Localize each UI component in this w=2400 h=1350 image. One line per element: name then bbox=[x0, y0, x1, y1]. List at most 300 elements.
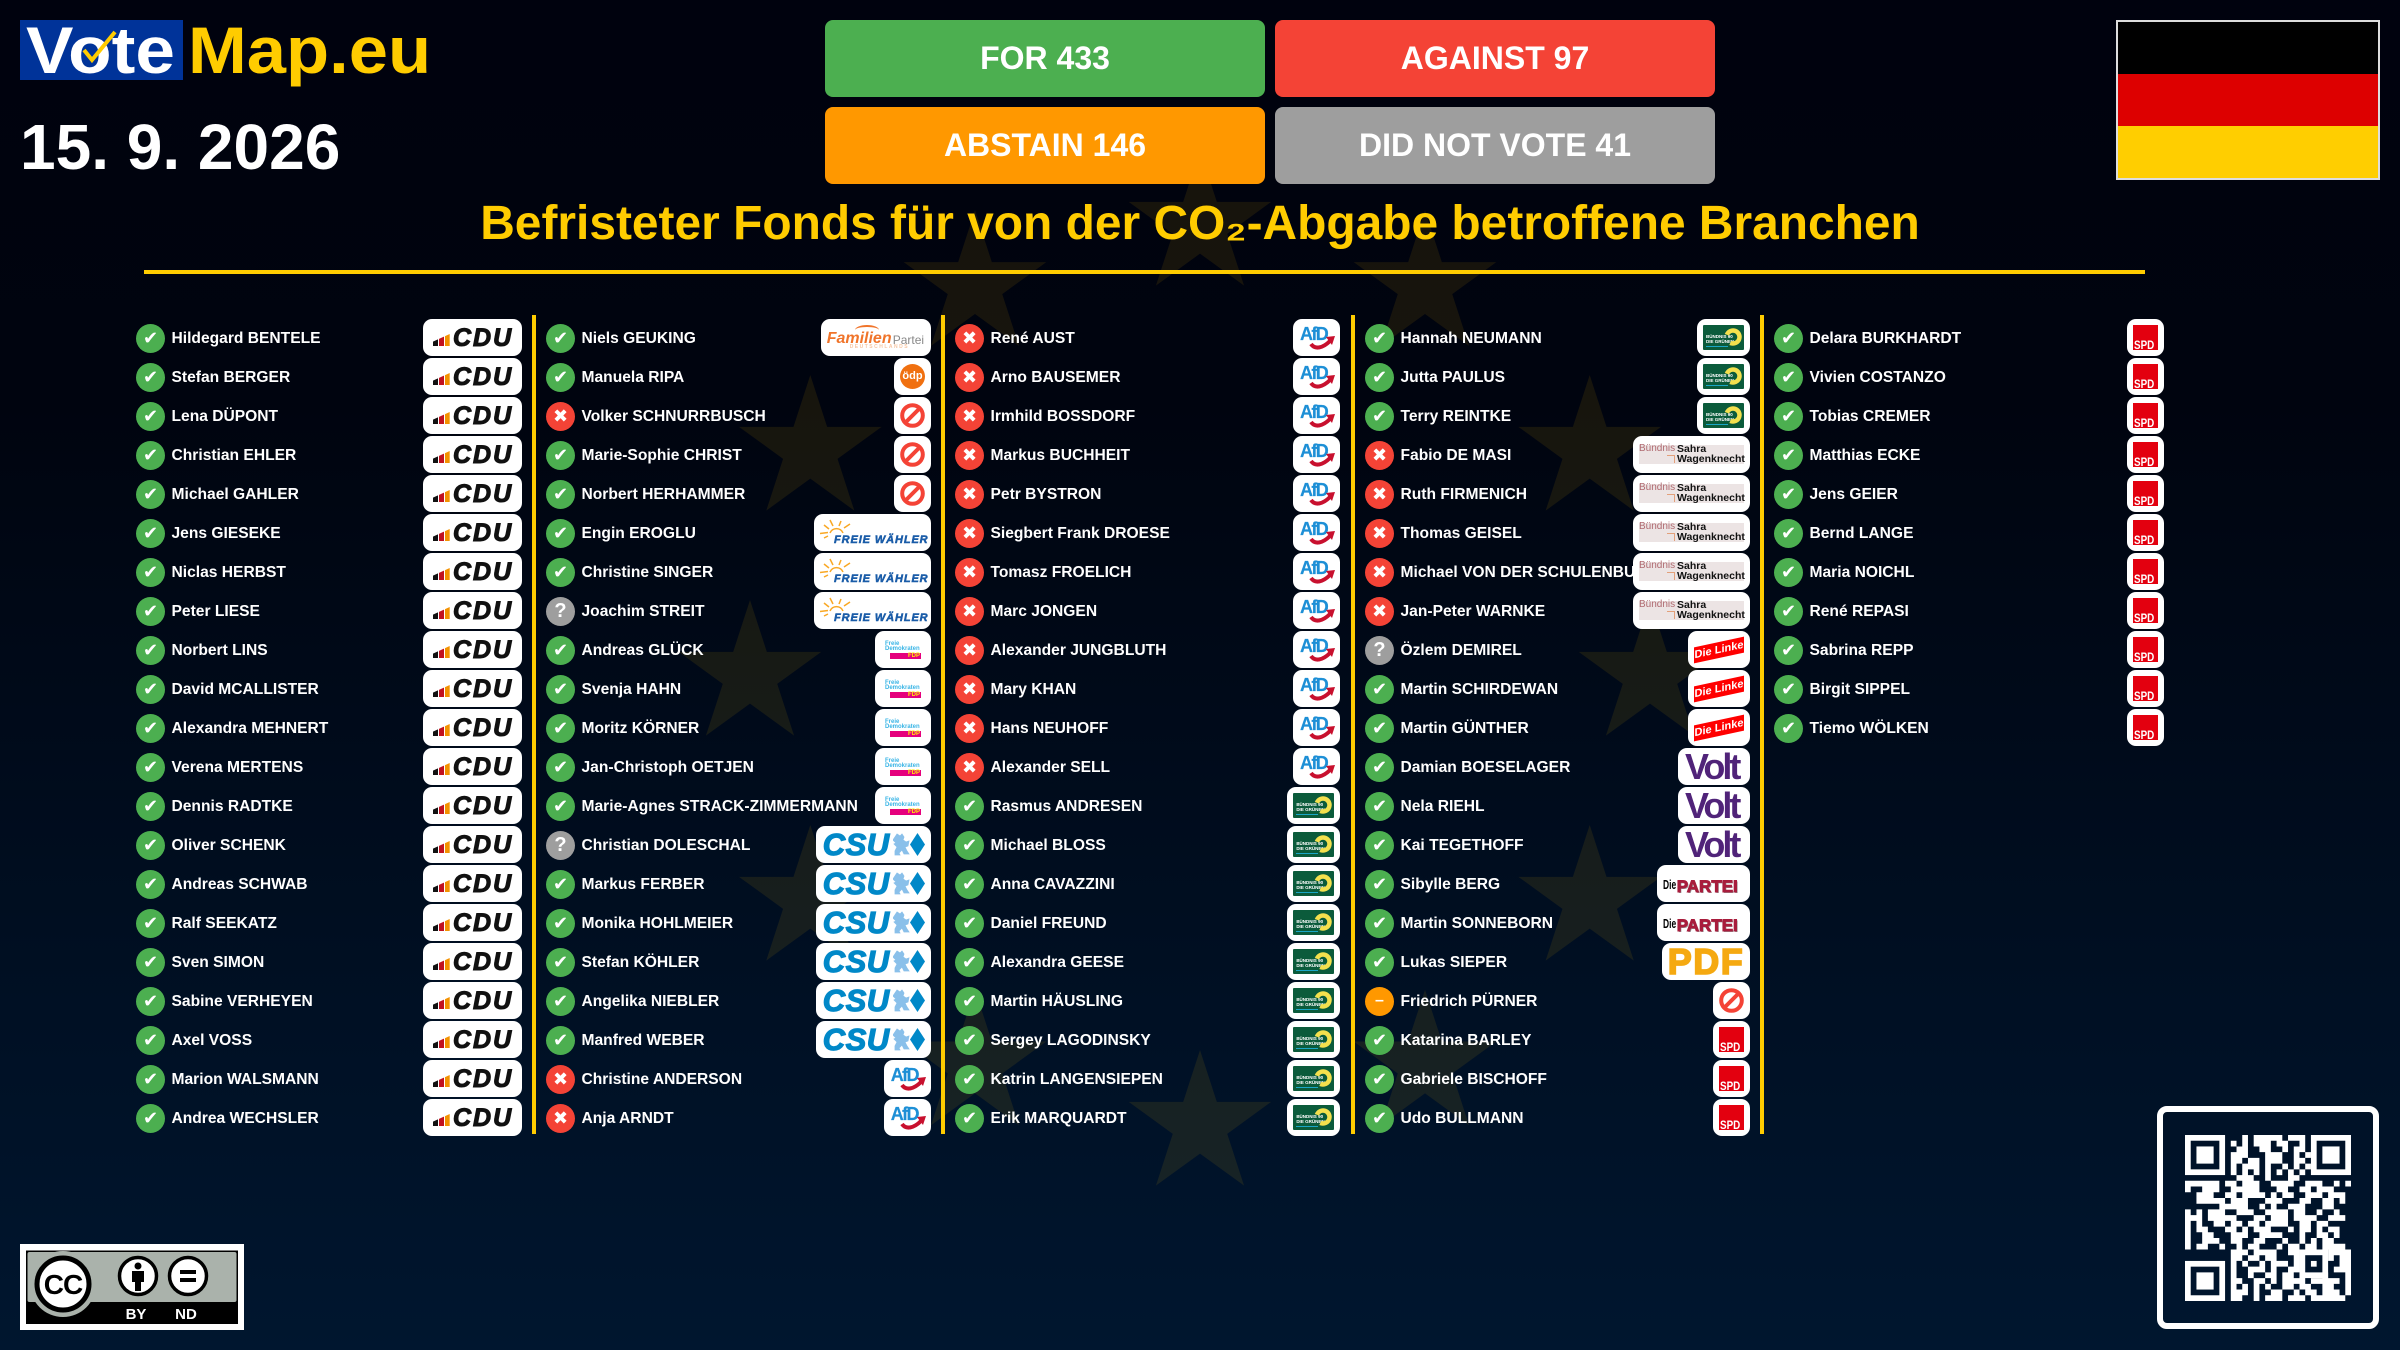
logo: Freie Wähler bbox=[814, 514, 931, 551]
logo: SPD bbox=[2127, 358, 2164, 395]
row: Katrin LANGENSIEPEN bbox=[955, 1060, 1340, 1097]
row: Martin SCHIRDEWAN: Martin SCHIRDEWAN bbox=[1400, 681, 1558, 698]
logo: CDU: CDU bbox=[453, 986, 513, 1014]
logo: BSW bbox=[1633, 514, 1750, 551]
row: Andrea WECHSLER: ✔ bbox=[143, 1108, 158, 1129]
row: Alexandra GEESE bbox=[955, 943, 1340, 980]
logo: Grüne: BÜNDNIS 90 bbox=[1706, 373, 1733, 378]
row: Volker SCHNURRBUSCH: ✖ bbox=[553, 406, 568, 427]
logo: CDU: CDU bbox=[453, 480, 513, 508]
row: Dennis RADTKE: ✔ bbox=[143, 796, 158, 817]
row: Svenja HAHN: Svenja HAHN bbox=[582, 681, 681, 698]
logo: CSU: CSU bbox=[823, 827, 890, 862]
logo: AfD bbox=[1293, 397, 1340, 434]
logo: CDU bbox=[423, 865, 522, 902]
row: Tobias CREMER: Tobias CREMER bbox=[1810, 408, 1931, 425]
logo: AfD: AfD bbox=[1300, 636, 1327, 656]
row: Michael VON DER SCHULENBURG: Michael VON DER SCHULENBURG bbox=[1400, 564, 1659, 581]
row: Monika HOHLMEIER: Monika HOHLMEIER bbox=[582, 915, 733, 932]
row: Svenja HAHN: ✔ bbox=[553, 679, 568, 700]
logo: CDU bbox=[423, 1060, 522, 1097]
logo: BSW: Wagenknecht bbox=[1677, 492, 1745, 504]
row: Oliver SCHENK bbox=[136, 826, 522, 863]
logo: SPD: SPD bbox=[1720, 1079, 1740, 1093]
row: Alexander JUNGBLUTH: Alexander JUNGBLUTH bbox=[990, 642, 1166, 659]
row: Martin HÄUSLING bbox=[955, 982, 1340, 1019]
row: Gabriele BISCHOFF: ✔ bbox=[1372, 1069, 1387, 1090]
row: Hans NEUHOFF: ✖ bbox=[962, 718, 977, 739]
logo: Die Linke bbox=[1688, 631, 1750, 668]
row: Jan-Peter WARNKE: ✖ bbox=[1372, 601, 1387, 622]
row: Udo BULLMANN: Udo BULLMANN bbox=[1400, 1110, 1524, 1127]
logo: SPD: SPD bbox=[2134, 650, 2154, 664]
row: Arno BAUSEMER: ✖ bbox=[962, 367, 977, 388]
logo: SPD: SPD bbox=[1720, 1040, 1740, 1054]
row: Tobias CREMER bbox=[1774, 397, 2164, 434]
logo: CSU bbox=[816, 982, 931, 1019]
row: Christian DOLESCHAL: ? bbox=[554, 834, 567, 856]
row: Christian DOLESCHAL: Christian DOLESCHAL bbox=[582, 837, 750, 854]
logo: SPD bbox=[2127, 436, 2164, 473]
logo: SPD bbox=[2127, 514, 2164, 551]
row: Tomasz FROELICH bbox=[955, 553, 1340, 590]
logo: AfD: AfD bbox=[1300, 753, 1327, 773]
row: Marie-Agnes STRACK-ZIMMERMANN bbox=[546, 787, 931, 824]
row: Katarina BARLEY bbox=[1365, 1021, 1750, 1058]
row: Christine ANDERSON: ✖ bbox=[553, 1069, 568, 1090]
row: Hannah NEUMANN: Hannah NEUMANN bbox=[1400, 330, 1542, 347]
logo: CDU bbox=[423, 748, 522, 785]
row: Matthias ECKE: Matthias ECKE bbox=[1810, 447, 1920, 464]
row: Manuela RIPA bbox=[546, 358, 931, 395]
logo: CDU bbox=[423, 826, 522, 863]
row: Ralf SEEKATZ: Ralf SEEKATZ bbox=[172, 915, 277, 932]
logo: CSU bbox=[816, 1021, 931, 1058]
row: Jutta PAULUS: ✔ bbox=[1372, 367, 1387, 388]
logo: Grüne bbox=[1287, 1099, 1340, 1136]
row: Kai TEGETHOFF bbox=[1365, 826, 1750, 863]
logo: Die Linke bbox=[1688, 709, 1750, 746]
row: Alexandra MEHNERT: Alexandra MEHNERT bbox=[172, 720, 328, 737]
row: Monika HOHLMEIER bbox=[546, 904, 931, 941]
row: Thomas GEISEL bbox=[1365, 514, 1750, 551]
logo: BSW: Bündnis bbox=[1639, 599, 1675, 610]
row: Sabine VERHEYEN: Sabine VERHEYEN bbox=[172, 993, 313, 1010]
vote count: abstain bbox=[825, 107, 1265, 184]
logo: SPD: SPD bbox=[2134, 611, 2154, 625]
row: Monika HOHLMEIER: ✔ bbox=[553, 913, 568, 934]
row: Hannah NEUMANN bbox=[1365, 319, 1750, 356]
license badge: CC BY-ND: BY bbox=[126, 1306, 146, 1323]
row: Katrin LANGENSIEPEN: Katrin LANGENSIEPEN bbox=[990, 1071, 1163, 1088]
logo: CDU bbox=[423, 631, 522, 668]
row: Fabio DE MASI: Fabio DE MASI bbox=[1400, 447, 1511, 464]
logo: AfD: AfD bbox=[1300, 402, 1327, 422]
row: Niels GEUKING bbox=[546, 319, 931, 356]
row: Nela RIEHL bbox=[1365, 787, 1750, 824]
row: Engin EROGLU: Engin EROGLU bbox=[582, 525, 696, 542]
logo: SPD bbox=[1713, 1060, 1750, 1097]
logo: SPD: SPD bbox=[2134, 533, 2154, 547]
logo: SPD bbox=[2127, 319, 2164, 356]
logo: Grüne: DIE GRÜNEN bbox=[1706, 339, 1734, 344]
row: Lukas SIEPER: ✔ bbox=[1372, 952, 1387, 973]
logo: ödp: ödp bbox=[902, 370, 923, 382]
row: Marie-Sophie CHRIST: Marie-Sophie CHRIST bbox=[582, 447, 742, 464]
row: Christian EHLER bbox=[136, 436, 522, 473]
row: Marie-Sophie CHRIST: ✔ bbox=[553, 445, 568, 466]
row: Markus BUCHHEIT: Markus BUCHHEIT bbox=[990, 447, 1130, 464]
logo: FDP: FDP bbox=[908, 770, 920, 776]
logo: AfD bbox=[1293, 553, 1340, 590]
logo: FDP: Demokraten bbox=[885, 684, 920, 690]
panel: column 5 bbox=[1774, 319, 2164, 748]
logo: CDU: CDU bbox=[453, 1104, 513, 1132]
logo: CDU: CDU bbox=[453, 792, 513, 820]
row: Norbert HERHAMMER: Norbert HERHAMMER bbox=[582, 486, 745, 503]
row: Irmhild BOSSDORF: Irmhild BOSSDORF bbox=[990, 408, 1135, 425]
row: Christine SINGER: ✔ bbox=[553, 562, 568, 583]
row: Jens GEIER: Jens GEIER bbox=[1810, 486, 1898, 503]
row: Michael GAHLER: Michael GAHLER bbox=[172, 486, 299, 503]
row: Terry REINTKE bbox=[1365, 397, 1750, 434]
logo: AfD: AfD bbox=[1300, 441, 1327, 461]
row: Arno BAUSEMER: Arno BAUSEMER bbox=[990, 369, 1120, 386]
row: Niclas HERBST: Niclas HERBST bbox=[172, 564, 286, 581]
logo: BSW: Sahra bbox=[1677, 560, 1706, 572]
row: Angelika NIEBLER: ✔ bbox=[553, 991, 568, 1012]
row: René REPASI: René REPASI bbox=[1810, 603, 1909, 620]
logo: VoteMap.eu: Vote bbox=[26, 13, 174, 87]
logo: Grüne bbox=[1287, 787, 1340, 824]
vote count: did not vote bbox=[1275, 107, 1715, 184]
row: René AUST: ✖ bbox=[962, 328, 977, 349]
logo: CDU bbox=[423, 553, 522, 590]
row: Christian DOLESCHAL bbox=[546, 826, 931, 863]
logo: AfD bbox=[1293, 358, 1340, 395]
logo: SPD bbox=[2127, 553, 2164, 590]
logo: CSU bbox=[816, 943, 931, 980]
logo: Familien-Partei: Partei bbox=[893, 333, 924, 347]
logo: Freie Wähler: FREIE WÄHLER bbox=[834, 612, 929, 624]
logo: Grüne: DIE GRÜNEN bbox=[1296, 807, 1325, 812]
title: Befristeter Fonds für von der CO₂-Abgabe betroffene Branchen bbox=[480, 197, 1920, 250]
row: Martin SONNEBORN: ✔ bbox=[1372, 913, 1387, 934]
logo: CSU: CSU bbox=[823, 866, 890, 901]
row: Ruth FIRMENICH: ✖ bbox=[1372, 484, 1387, 505]
row: Engin EROGLU: ✔ bbox=[553, 523, 568, 544]
row: Lukas SIEPER: Lukas SIEPER bbox=[1400, 954, 1507, 971]
row: Ruth FIRMENICH: Ruth FIRMENICH bbox=[1400, 486, 1527, 503]
row: Kai TEGETHOFF: Kai TEGETHOFF bbox=[1400, 837, 1524, 854]
row: Jens GIESEKE: ✔ bbox=[143, 523, 158, 544]
row: Fabio DE MASI bbox=[1365, 436, 1750, 473]
row: Hans NEUHOFF bbox=[955, 709, 1340, 746]
logo: BSW bbox=[1633, 475, 1750, 512]
row: Jens GIESEKE bbox=[136, 514, 522, 551]
row: Niclas HERBST bbox=[136, 553, 522, 590]
row: Michael GAHLER bbox=[136, 475, 522, 512]
logo: Grüne bbox=[1287, 943, 1340, 980]
logo: Grüne bbox=[1287, 865, 1340, 902]
logo: Die PARTEI: Die bbox=[1663, 916, 1676, 931]
row: Damian BOESELAGER bbox=[1365, 748, 1750, 785]
logo: SPD bbox=[2127, 631, 2164, 668]
row: Alexandra GEESE: ✔ bbox=[962, 952, 977, 973]
row: Dennis RADTKE bbox=[136, 787, 522, 824]
logo: CDU: CDU bbox=[453, 830, 513, 858]
logo: CDU: CDU bbox=[453, 596, 513, 624]
logo: CDU bbox=[423, 787, 522, 824]
row: Verena MERTENS bbox=[136, 748, 522, 785]
row: Sibylle BERG bbox=[1365, 865, 1750, 902]
logo: Grüne: DIE GRÜNEN bbox=[1296, 1080, 1325, 1085]
row: Martin SONNEBORN bbox=[1365, 904, 1750, 941]
logo: Grüne bbox=[1697, 397, 1750, 434]
row: Christian EHLER: Christian EHLER bbox=[172, 447, 296, 464]
logo: CSU: CSU bbox=[823, 983, 890, 1018]
logo: BSW: Bündnis bbox=[1639, 443, 1675, 454]
logo: FDP: Freie bbox=[885, 796, 899, 802]
logo: FDP: FDP bbox=[908, 653, 920, 659]
row: Vivien COSTANZO bbox=[1774, 358, 2164, 395]
logo: SPD: SPD bbox=[2134, 494, 2154, 508]
row: Jan-Christoph OETJEN bbox=[546, 748, 931, 785]
logo: Die PARTEI: PARTEI bbox=[1677, 877, 1738, 896]
row: René REPASI bbox=[1774, 592, 2164, 629]
logo: SPD: SPD bbox=[2134, 377, 2154, 391]
row: Friedrich PÜRNER bbox=[1365, 982, 1750, 1019]
row: Svenja HAHN bbox=[546, 670, 931, 707]
logo: Die PARTEI: PARTEI bbox=[1677, 916, 1738, 935]
logo: FDP: Demokraten bbox=[885, 762, 920, 768]
row: Sabrina REPP: Sabrina REPP bbox=[1810, 642, 1914, 659]
logo: CDU bbox=[423, 592, 522, 629]
row: Petr BYSTRON bbox=[955, 475, 1340, 512]
row: Bernd LANGE: ✔ bbox=[1781, 523, 1796, 544]
logo: AfD bbox=[1293, 319, 1340, 356]
logo: Die Linke: Die Linke bbox=[1695, 638, 1743, 661]
row: Hans NEUHOFF: Hans NEUHOFF bbox=[990, 720, 1108, 737]
row: Sabrina REPP bbox=[1774, 631, 2164, 668]
logo: Grüne: DIE GRÜNEN bbox=[1296, 885, 1325, 890]
row: Erik MARQUARDT: ✔ bbox=[962, 1108, 977, 1129]
row: Lena DÜPONT: Lena DÜPONT bbox=[172, 408, 278, 425]
logo: CSU: CSU bbox=[823, 944, 890, 979]
row: Hildegard BENTELE: ✔ bbox=[143, 328, 158, 349]
logo: CDU: CDU bbox=[453, 636, 513, 664]
logo: FDP: Demokraten bbox=[885, 802, 920, 808]
row: Michael VON DER SCHULENBURG bbox=[1365, 553, 1750, 590]
logo: BSW: Bündnis bbox=[1639, 521, 1675, 532]
logo: AfD: AfD bbox=[891, 1104, 918, 1124]
logo: SPD bbox=[2127, 475, 2164, 512]
logo: Grüne bbox=[1287, 826, 1340, 863]
date: 15. 9. 2026 bbox=[20, 111, 340, 183]
row: Norbert HERHAMMER bbox=[546, 475, 931, 512]
row: Sven SIMON: Sven SIMON bbox=[172, 954, 264, 971]
row: Volker SCHNURRBUSCH: Volker SCHNURRBUSCH bbox=[582, 408, 766, 425]
logo: VoteMap.eu bbox=[20, 13, 431, 87]
logo: FDP: Freie bbox=[885, 758, 899, 764]
logo: CDU bbox=[423, 436, 522, 473]
row: Andreas GLÜCK: ✔ bbox=[553, 640, 568, 661]
row: Alexander JUNGBLUTH bbox=[955, 631, 1340, 668]
row: David MCALLISTER: ✔ bbox=[143, 679, 158, 700]
row: Christian EHLER: ✔ bbox=[143, 445, 158, 466]
logo: BSW bbox=[1633, 436, 1750, 473]
row: Stefan KÖHLER: ✔ bbox=[553, 952, 568, 973]
row: Delara BURKHARDT: Delara BURKHARDT bbox=[1810, 330, 1961, 347]
logo: SPD: SPD bbox=[2134, 416, 2154, 430]
row: Angelika NIEBLER: Angelika NIEBLER bbox=[582, 993, 719, 1010]
row: Martin SCHIRDEWAN: ✔ bbox=[1372, 679, 1387, 700]
row: Katarina BARLEY: ✔ bbox=[1372, 1030, 1387, 1051]
row: Anja ARNDT bbox=[546, 1099, 931, 1136]
logo: CSU bbox=[816, 865, 931, 902]
row: David MCALLISTER bbox=[136, 670, 522, 707]
row: Sven SIMON: ✔ bbox=[143, 952, 158, 973]
row: Sergey LAGODINSKY bbox=[955, 1021, 1340, 1058]
row: Siegbert Frank DROESE: ✖ bbox=[962, 523, 977, 544]
row: Lena DÜPONT: ✔ bbox=[143, 406, 158, 427]
row: Moritz KÖRNER: ✔ bbox=[553, 718, 568, 739]
logo: Grüne: BÜNDNIS 90 bbox=[1706, 412, 1733, 417]
row: Andrea WECHSLER bbox=[136, 1099, 522, 1136]
row: Christine SINGER bbox=[546, 553, 931, 590]
logo: FDP: Freie bbox=[885, 640, 899, 646]
row: Petr BYSTRON: ✖ bbox=[962, 484, 977, 505]
logo: Grüne: BÜNDNIS 90 bbox=[1296, 880, 1323, 885]
logo: FDP bbox=[875, 748, 931, 785]
logo: CSU bbox=[816, 826, 931, 863]
logo: Die PARTEI bbox=[1657, 865, 1750, 902]
row: Nela RIEHL: Nela RIEHL bbox=[1400, 798, 1485, 815]
vote count: against bbox=[1275, 20, 1715, 97]
row: Özlem DEMIREL bbox=[1365, 631, 1750, 668]
row: Andreas GLÜCK: Andreas GLÜCK bbox=[582, 642, 704, 659]
row: Jutta PAULUS bbox=[1365, 358, 1750, 395]
row: Ruth FIRMENICH bbox=[1365, 475, 1750, 512]
row: Katarina BARLEY: Katarina BARLEY bbox=[1400, 1032, 1531, 1049]
row: Rasmus ANDRESEN bbox=[955, 787, 1340, 824]
logo: FDP: Demokraten bbox=[885, 646, 920, 652]
vote count: for: FOR 433 bbox=[980, 40, 1110, 76]
row: Axel VOSS: Axel VOSS bbox=[172, 1032, 252, 1049]
row: Norbert LINS bbox=[136, 631, 522, 668]
logo: Grüne: BÜNDNIS 90 bbox=[1706, 334, 1733, 339]
row: Axel VOSS bbox=[136, 1021, 522, 1058]
row: Irmhild BOSSDORF bbox=[955, 397, 1340, 434]
vote count: did not vote: DID NOT VOTE 41 bbox=[1359, 127, 1631, 163]
logo: Grüne: DIE GRÜNEN bbox=[1296, 924, 1325, 929]
logo: BSW: Wagenknecht bbox=[1677, 570, 1745, 582]
logo: FDP bbox=[875, 787, 931, 824]
row: Andreas GLÜCK bbox=[546, 631, 931, 668]
row: Angelika NIEBLER bbox=[546, 982, 931, 1019]
logo: Grüne: DIE GRÜNEN bbox=[1706, 378, 1734, 383]
row: Michael VON DER SCHULENBURG: ✖ bbox=[1372, 562, 1387, 583]
logo: CDU bbox=[423, 514, 522, 551]
logo: AfD bbox=[884, 1099, 931, 1136]
row: Jan-Christoph OETJEN: ✔ bbox=[553, 757, 568, 778]
row: Hildegard BENTELE: Hildegard BENTELE bbox=[172, 330, 321, 347]
logo: CDU: CDU bbox=[453, 362, 513, 390]
logo: AfD bbox=[1293, 475, 1340, 512]
row: Alexandra MEHNERT bbox=[136, 709, 522, 746]
row: Joachim STREIT bbox=[546, 592, 931, 629]
logo: Grüne: BÜNDNIS 90 bbox=[1296, 841, 1323, 846]
license badge: CC BY-ND bbox=[20, 1244, 244, 1330]
logo: Grüne bbox=[1287, 904, 1340, 941]
logo: SPD: SPD bbox=[2134, 338, 2154, 352]
row: Sibylle BERG: Sibylle BERG bbox=[1400, 876, 1500, 893]
row: Friedrich PÜRNER: Friedrich PÜRNER bbox=[1400, 993, 1537, 1010]
row: Daniel FREUND bbox=[955, 904, 1340, 941]
logo: Familien-Partei: Familien bbox=[827, 330, 892, 347]
row: Özlem DEMIREL: Özlem DEMIREL bbox=[1400, 642, 1522, 659]
row: Stefan KÖHLER: Stefan KÖHLER bbox=[582, 954, 699, 971]
logo: CDU: CDU bbox=[453, 558, 513, 586]
row: Sergey LAGODINSKY: ✔ bbox=[962, 1030, 977, 1051]
logo: CDU: CDU bbox=[453, 674, 513, 702]
vote count: abstain: ABSTAIN 146 bbox=[944, 127, 1146, 163]
row: Jan-Christoph OETJEN: Jan-Christoph OETJEN bbox=[582, 759, 754, 776]
logo: SPD bbox=[2127, 397, 2164, 434]
logo: SPD bbox=[1713, 1021, 1750, 1058]
row: Jan-Peter WARNKE: Jan-Peter WARNKE bbox=[1400, 603, 1545, 620]
logo: AfD bbox=[1293, 436, 1340, 473]
row: Norbert LINS: Norbert LINS bbox=[172, 642, 268, 659]
logo: AfD: AfD bbox=[1300, 558, 1327, 578]
logo: FDP: Freie bbox=[885, 718, 899, 724]
icon: no party bbox=[1713, 982, 1750, 1019]
icon: no party bbox=[894, 436, 931, 473]
logo: Grüne: DIE GRÜNEN bbox=[1296, 1119, 1325, 1124]
logo: FDP bbox=[875, 709, 931, 746]
row: Martin GÜNTHER bbox=[1365, 709, 1750, 746]
row: Christine ANDERSON bbox=[546, 1060, 931, 1097]
panel: column 4 bbox=[1365, 319, 1750, 1138]
row: Gabriele BISCHOFF: Gabriele BISCHOFF bbox=[1400, 1071, 1547, 1088]
row: Michael GAHLER: ✔ bbox=[143, 484, 158, 505]
logo: SPD: SPD bbox=[2134, 455, 2154, 469]
logo: CDU bbox=[423, 670, 522, 707]
logo: CDU: CDU bbox=[453, 908, 513, 936]
row: Peter LIESE: Peter LIESE bbox=[172, 603, 260, 620]
logo: SPD bbox=[2127, 709, 2164, 746]
logo: Grüne: DIE GRÜNEN bbox=[1296, 963, 1325, 968]
row: Birgit SIPPEL: ✔ bbox=[1781, 679, 1796, 700]
row: Andreas SCHWAB bbox=[136, 865, 522, 902]
logo: AfD bbox=[1293, 514, 1340, 551]
logo: SPD bbox=[2127, 670, 2164, 707]
logo: Grüne: DIE GRÜNEN bbox=[1296, 1041, 1325, 1046]
logo: CDU bbox=[423, 943, 522, 980]
row: Anna CAVAZZINI: Anna CAVAZZINI bbox=[990, 876, 1115, 893]
vote count: against: AGAINST 97 bbox=[1401, 40, 1589, 76]
row: Markus FERBER: ✔ bbox=[553, 874, 568, 895]
row: Jutta PAULUS: Jutta PAULUS bbox=[1400, 369, 1505, 386]
row: Vivien COSTANZO: Vivien COSTANZO bbox=[1810, 369, 1946, 386]
logo: Grüne bbox=[1287, 1021, 1340, 1058]
row: Jens GIESEKE: Jens GIESEKE bbox=[172, 525, 281, 542]
row: Markus BUCHHEIT bbox=[955, 436, 1340, 473]
logo: Grüne: DIE GRÜNEN bbox=[1296, 1002, 1325, 1007]
logo: CDU: CDU bbox=[453, 714, 513, 742]
logo: VoteMap.eu: Map.eu bbox=[188, 13, 431, 87]
row: Stefan BERGER bbox=[136, 358, 522, 395]
